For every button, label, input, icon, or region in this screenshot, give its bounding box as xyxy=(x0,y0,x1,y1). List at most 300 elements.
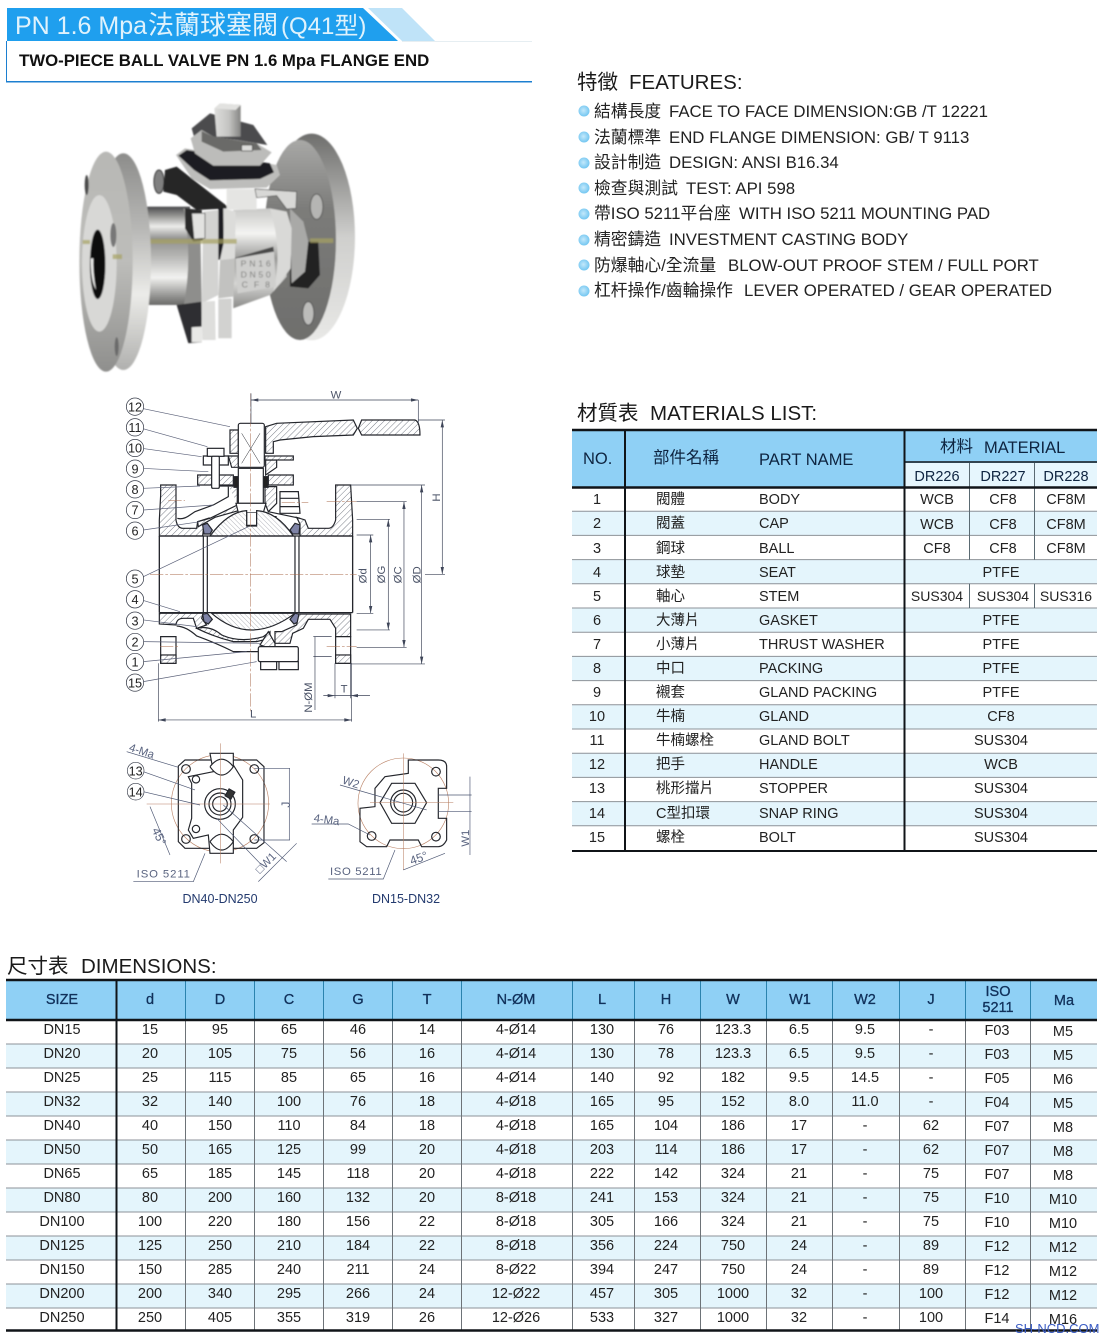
dimensions rows: 222 xyxy=(590,1166,614,1182)
dimensions rows: 75 xyxy=(281,1046,297,1062)
dimensions rows: 327 xyxy=(654,1310,678,1326)
dimensions rows: 180 xyxy=(277,1214,301,1230)
dimensions rows: 114 xyxy=(654,1142,678,1158)
dimensions rows: 355 xyxy=(277,1310,301,1326)
dimensions rows: F14 xyxy=(984,1311,1010,1327)
dimensions rows: DN20 xyxy=(43,1046,81,1062)
features list: FACE TO FACE DIMENSION:GB /T 12221 xyxy=(669,102,988,121)
top view drawing: DN40-DN250: □W1 xyxy=(254,851,279,876)
dimensions rows: 1000 xyxy=(717,1310,749,1326)
dimensions rows: 100 xyxy=(138,1214,162,1230)
dimensions rows: M10 xyxy=(1049,1216,1077,1232)
dimensions rows: 405 xyxy=(208,1310,232,1326)
materials rows: PTFE xyxy=(982,565,1020,581)
dimensions header: W2 xyxy=(854,992,876,1008)
part number callouts: 8 xyxy=(131,483,139,497)
dimensions rows: - xyxy=(863,1214,868,1230)
materials rows: CF8M xyxy=(1046,541,1086,557)
materials rows: SNAP RING xyxy=(759,806,839,822)
dimensions rows: 24 xyxy=(419,1262,435,1278)
dimensions rows: 160 xyxy=(277,1190,301,1206)
dimensions rows: 324 xyxy=(721,1166,745,1182)
dimensions rows: 104 xyxy=(654,1118,678,1134)
dimensions rows: 457 xyxy=(590,1286,614,1302)
dimensions rows: 84 xyxy=(350,1118,366,1134)
drawing captions: DN15-DN32 xyxy=(372,892,440,906)
materials rows: SUS304 xyxy=(911,588,963,604)
dimensions rows xyxy=(39,1022,1077,1328)
dimensions header: W1 xyxy=(789,992,811,1008)
dimensions rows: 24 xyxy=(791,1238,807,1254)
materials rows: 中口 xyxy=(656,661,685,677)
materials rows: 軸心 xyxy=(656,589,685,605)
dimensions rows: 203 xyxy=(590,1142,614,1158)
dimensions rows: F07 xyxy=(984,1167,1010,1183)
dimensions rows: 24 xyxy=(419,1286,435,1302)
dimensions rows: - xyxy=(863,1166,868,1182)
dimensions rows: DN125 xyxy=(39,1238,85,1254)
dimensions rows: 132 xyxy=(346,1190,370,1206)
dimensions rows: 8-Ø18 xyxy=(496,1214,536,1230)
dimensions rows: - xyxy=(863,1262,868,1278)
dimensions rows: 22 xyxy=(419,1238,435,1254)
dimensions rows: F10 xyxy=(984,1215,1010,1231)
dimensions rows: 32 xyxy=(791,1310,807,1326)
dimensions rows: 76 xyxy=(658,1022,674,1038)
materials rows: 13 xyxy=(589,781,605,797)
materials rows: CAP xyxy=(759,516,789,532)
section drawing: valve cross-section: W xyxy=(331,389,342,401)
title banner xyxy=(6,8,532,82)
top view drawing: DN40-DN250: J xyxy=(279,802,293,808)
materials rows: 球墊 xyxy=(656,565,685,581)
dimensions rows: 14 xyxy=(419,1022,435,1038)
materials rows: 14 xyxy=(589,806,605,822)
dimensions rows: F05 xyxy=(984,1071,1010,1087)
features list: END FLANGE DIMENSION: GB/ T 9113 xyxy=(669,128,969,147)
dimensions rows: DN250 xyxy=(39,1310,85,1326)
dimensions rows: 295 xyxy=(277,1286,301,1302)
materials rows: SUS304 xyxy=(974,733,1028,749)
materials rows xyxy=(589,491,1092,846)
features list: 結構長度 xyxy=(594,102,661,121)
dimensions rows: 100 xyxy=(919,1286,943,1302)
dimensions rows: DN150 xyxy=(39,1262,85,1278)
materials rows: PTFE xyxy=(982,613,1020,629)
dimensions rows: 21 xyxy=(791,1214,807,1230)
dimensions rows: M5 xyxy=(1053,1024,1073,1040)
dimensions header: J xyxy=(927,992,935,1008)
section drawing: valve cross-section: ØD xyxy=(412,566,424,583)
dimensions rows: 26 xyxy=(419,1310,435,1326)
materials rows: 15 xyxy=(589,830,605,846)
dimensions rows: - xyxy=(863,1286,868,1302)
dimensions rows: 75 xyxy=(923,1190,939,1206)
dimensions rows: F07 xyxy=(984,1143,1010,1159)
materials rows: 鋼球 xyxy=(656,541,685,557)
dimensions header: d xyxy=(146,992,154,1008)
dimensions header: D xyxy=(215,992,225,1008)
title text: 法蘭球塞閥 xyxy=(148,10,278,40)
dimensions rows: 17 xyxy=(791,1118,807,1134)
heading: features: FEATURES: xyxy=(629,71,743,94)
dimensions rows: 62 xyxy=(923,1118,939,1134)
materials rows: 1 xyxy=(593,492,601,508)
dimensions rows: 123.3 xyxy=(715,1022,751,1038)
dimensions rows: 18 xyxy=(419,1118,435,1134)
dimensions rows: DN65 xyxy=(43,1166,81,1182)
dimensions rows: 156 xyxy=(346,1214,370,1230)
materials rows: 7 xyxy=(593,637,601,653)
dimensions rows: 4-Ø14 xyxy=(496,1046,536,1062)
dimensions rows: 152 xyxy=(721,1094,745,1110)
dimensions header: SIZE xyxy=(46,992,78,1008)
dimensions rows: 4-Ø18 xyxy=(496,1094,536,1110)
materials rows: THRUST WASHER xyxy=(759,637,885,653)
dimensions rows: 150 xyxy=(208,1118,232,1134)
materials rows: 大薄片 xyxy=(656,613,700,629)
dimensions rows: 9.5 xyxy=(855,1022,875,1038)
part number callouts xyxy=(126,398,144,691)
top view drawing: DN40-DN250: ISO 5211 xyxy=(137,868,190,880)
dimensions header: N-ØM xyxy=(497,992,535,1008)
dimensions rows: 8-Ø18 xyxy=(496,1190,536,1206)
dimensions rows: 89 xyxy=(923,1262,939,1278)
dimensions rows: 140 xyxy=(208,1094,232,1110)
dimensions rows: 78 xyxy=(658,1046,674,1062)
materials rows: 3 xyxy=(593,541,601,557)
top view drawing: DN40-DN250: 13 xyxy=(129,764,143,778)
dimensions rows: 250 xyxy=(138,1310,162,1326)
top view drawing: DN40-DN250: 14 xyxy=(129,785,143,799)
materials rows: CF8 xyxy=(923,541,951,557)
dimensions rows: 15 xyxy=(142,1022,158,1038)
section drawing: valve cross-section: N-ØM xyxy=(303,682,315,713)
materials rows: WCB xyxy=(920,492,954,508)
top view drawing: DN15-DN32: W1 xyxy=(460,830,472,847)
dimensions rows: F07 xyxy=(984,1119,1010,1135)
materials rows: 襯套 xyxy=(656,685,685,701)
dimensions rows: 182 xyxy=(721,1070,745,1086)
features list: BLOW-OUT PROOF STEM / FULL PORT xyxy=(728,256,1039,275)
features list: 檢查與測試 xyxy=(594,179,678,198)
dimension lines xyxy=(158,393,445,722)
materials rows: 10 xyxy=(589,709,605,725)
features list: 防爆軸心/全流量 xyxy=(594,256,716,275)
top view drawing: DN40-DN250: 4-Ma xyxy=(127,742,156,762)
dimensions rows: 240 xyxy=(277,1262,301,1278)
features list: 杠杆操作/齒輪操作 xyxy=(594,281,733,300)
dimensions rows: 20 xyxy=(419,1166,435,1182)
dimensions rows: 324 xyxy=(721,1214,745,1230)
materials header text: MATERIAL xyxy=(984,439,1065,457)
features list: TEST: API 598 xyxy=(686,179,795,198)
heading: features: 特徵 xyxy=(577,71,618,94)
top view drawing: DN15-DN32: ISO 5211 xyxy=(330,866,382,878)
dimensions rows: M6 xyxy=(1053,1072,1073,1088)
part number callouts: 10 xyxy=(128,442,142,456)
subtitle: TWO-PIECE BALL VALVE PN 1.6 Mpa FLANGE END xyxy=(19,51,429,70)
dimensions header: Ma xyxy=(1054,993,1075,1009)
dimensions rows: 247 xyxy=(654,1262,678,1278)
dimensions rows: 11.0 xyxy=(851,1094,879,1110)
dimensions header: C xyxy=(284,992,294,1008)
dimensions rows: 211 xyxy=(346,1262,370,1278)
section drawing: valve cross-section: H xyxy=(431,493,443,502)
dimensions rows: DN15 xyxy=(43,1022,81,1038)
dimensions rows: 21 xyxy=(791,1166,807,1182)
section drawing: valve cross-section: ØG xyxy=(376,566,388,583)
materials rows: 小薄片 xyxy=(656,637,700,653)
features list: 設計制造 xyxy=(594,153,661,172)
dimensions rows: 62 xyxy=(923,1142,939,1158)
dimensions rows: 185 xyxy=(208,1166,232,1182)
dimensions rows: M5 xyxy=(1053,1048,1073,1064)
dimensions rows: 224 xyxy=(654,1238,678,1254)
materials rows: CF8 xyxy=(987,709,1015,725)
dimensions rows: - xyxy=(863,1118,868,1134)
dimensions rows: DN32 xyxy=(43,1094,81,1110)
materials rows: STEM xyxy=(759,589,799,605)
materials rows: CF8 xyxy=(989,541,1017,557)
dimensions rows: 25 xyxy=(142,1070,158,1086)
dimensions rows: 150 xyxy=(138,1262,162,1278)
dimensions rows: DN50 xyxy=(43,1142,81,1158)
dimensions rows: F12 xyxy=(984,1287,1010,1303)
dimensions rows: 6.5 xyxy=(789,1046,809,1062)
features list xyxy=(578,102,1052,300)
materials rows: WCB xyxy=(920,517,954,533)
features list: 法蘭標準 xyxy=(594,128,661,147)
dimensions rows: 24 xyxy=(791,1262,807,1278)
top view drawing: DN40-DN250 xyxy=(127,742,297,882)
dimensions rows: - xyxy=(929,1022,934,1038)
materials rows: GLAND xyxy=(759,709,809,725)
dimensions rows: 9.5 xyxy=(789,1070,809,1086)
dimensions rows: 140 xyxy=(590,1070,614,1086)
dimensions rows: 4-Ø18 xyxy=(496,1142,536,1158)
table: dimensions xyxy=(6,980,1097,1331)
materials rows: HANDLE xyxy=(759,757,818,773)
dimensions rows: 75 xyxy=(923,1166,939,1182)
dimensions rows: 12-Ø26 xyxy=(492,1310,540,1326)
dimensions rows: 130 xyxy=(590,1022,614,1038)
features list: DESIGN: ANSI B16.34 xyxy=(669,153,839,172)
dimensions rows: 32 xyxy=(791,1286,807,1302)
materials rows: SUS304 xyxy=(974,830,1028,846)
dimensions rows: - xyxy=(929,1046,934,1062)
dimensions rows: DN25 xyxy=(43,1070,81,1086)
top view drawing: DN15-DN32: 45° xyxy=(408,848,430,868)
materials rows: GLAND BOLT xyxy=(759,733,850,749)
dimensions rows: 85 xyxy=(281,1070,297,1086)
section drawing: valve cross-section: Ød xyxy=(358,568,370,583)
dimensions rows: 12-Ø22 xyxy=(492,1286,540,1302)
features list: INVESTMENT CASTING BODY xyxy=(669,230,908,249)
dimensions header: T xyxy=(423,992,432,1008)
materials rows: 12 xyxy=(589,757,605,773)
dimensions rows: M8 xyxy=(1053,1144,1073,1160)
part number callouts: 11 xyxy=(128,421,142,435)
heading: materials list: MATERIALS LIST: xyxy=(650,402,817,425)
part number callouts: 12 xyxy=(128,400,142,414)
materials rows: PTFE xyxy=(982,661,1020,677)
dimensions rows: 305 xyxy=(654,1286,678,1302)
dimensions rows: F04 xyxy=(984,1095,1010,1111)
materials rows: 螺栓 xyxy=(656,830,685,846)
dimensions rows: - xyxy=(929,1094,934,1110)
top view drawing: DN40-DN250: 45° xyxy=(149,825,169,848)
dimensions rows: M10 xyxy=(1049,1192,1077,1208)
dimensions rows: M16 xyxy=(1049,1312,1077,1328)
dimensions rows: 20 xyxy=(419,1190,435,1206)
dimensions rows: 20 xyxy=(142,1046,158,1062)
dimensions rows: 220 xyxy=(208,1214,232,1230)
materials rows: PACKING xyxy=(759,661,823,677)
dimensions rows: 200 xyxy=(208,1190,232,1206)
materials rows: PTFE xyxy=(982,685,1020,701)
materials rows: 閥蓋 xyxy=(656,516,685,532)
part number callouts: 15 xyxy=(128,676,142,690)
dimensions rows: 145 xyxy=(277,1166,301,1182)
heading: dimensions: 尺寸表 xyxy=(7,955,68,978)
dimensions rows: 210 xyxy=(277,1238,301,1254)
materials rows: 牛楠 xyxy=(656,709,685,725)
dimensions rows: 32 xyxy=(142,1094,158,1110)
dimensions rows: 319 xyxy=(346,1310,370,1326)
materials rows: 桃形擋片 xyxy=(656,781,714,797)
dimensions rows: - xyxy=(929,1070,934,1086)
materials rows: 9 xyxy=(593,685,601,701)
materials rows: CF8M xyxy=(1046,492,1086,508)
dimensions rows: 56 xyxy=(350,1046,366,1062)
dimensions rows: 305 xyxy=(590,1214,614,1230)
materials header text: PART NAME xyxy=(759,451,853,469)
section drawing: valve cross-section: T xyxy=(341,684,348,696)
materials rows: 11 xyxy=(589,733,605,749)
dimensions rows: 340 xyxy=(208,1286,232,1302)
dimensions rows: 110 xyxy=(277,1118,301,1134)
materials rows: CF8M xyxy=(1046,517,1086,533)
dimensions rows: 95 xyxy=(212,1022,228,1038)
dimensions rows: 125 xyxy=(138,1238,162,1254)
dimensions rows: 17 xyxy=(791,1142,807,1158)
dimensions rows: M5 xyxy=(1053,1096,1073,1112)
product photo: ball valve xyxy=(79,103,355,372)
materials rows: SUS304 xyxy=(974,781,1028,797)
dimensions rows: 356 xyxy=(590,1238,614,1254)
table: materials list xyxy=(572,430,1097,851)
dimensions rows: 21 xyxy=(791,1190,807,1206)
dimensions header: L xyxy=(598,992,606,1008)
materials rows: 把手 xyxy=(656,757,685,773)
dimensions rows: 46 xyxy=(350,1022,366,1038)
dimensions rows: 165 xyxy=(590,1094,614,1110)
part number callouts: 4 xyxy=(131,593,139,607)
dimensions rows: 20 xyxy=(419,1142,435,1158)
features list: WITH ISO 5211 MOUNTING PAD xyxy=(739,204,990,223)
dimensions rows: F03 xyxy=(984,1023,1010,1039)
materials header text: DR226 xyxy=(914,469,960,485)
dimensions rows: - xyxy=(863,1310,868,1326)
dimensions rows: 130 xyxy=(590,1046,614,1062)
materials rows: 8 xyxy=(593,661,601,677)
dimensions rows: 1000 xyxy=(717,1286,749,1302)
dimensions rows: M12 xyxy=(1049,1240,1077,1256)
dimensions rows: M12 xyxy=(1049,1264,1077,1280)
product photo: ball valve: DN50 xyxy=(241,269,271,279)
product photo: ball valve: PN16 xyxy=(241,259,271,269)
heading: dimensions: DIMENSIONS: xyxy=(81,955,217,978)
watermark: SH-NCD.COM xyxy=(1015,1321,1100,1336)
dimensions rows: DN40 xyxy=(43,1118,81,1134)
dimensions rows: 105 xyxy=(208,1046,232,1062)
features list: LEVER OPERATED / GEAR OPERATED xyxy=(744,281,1052,300)
materials rows: SEAT xyxy=(759,565,796,581)
materials header text: DR227 xyxy=(980,469,1026,485)
dimensions rows: F12 xyxy=(984,1263,1010,1279)
dimensions rows: 100 xyxy=(919,1310,943,1326)
dimensions rows: 4-Ø18 xyxy=(496,1118,536,1134)
dimensions rows: 16 xyxy=(419,1046,435,1062)
dimensions rows: 100 xyxy=(277,1094,301,1110)
part number callouts: 7 xyxy=(131,504,139,518)
dimensions rows: 250 xyxy=(208,1238,232,1254)
dimensions rows: 76 xyxy=(350,1094,366,1110)
dimensions rows: 4-Ø18 xyxy=(496,1166,536,1182)
dimensions rows: 65 xyxy=(281,1022,297,1038)
features list: 精密鑄造 xyxy=(594,230,661,249)
materials rows: GASKET xyxy=(759,613,818,629)
dimensions header: 5211 xyxy=(982,1000,1014,1016)
dimensions header: G xyxy=(352,992,364,1008)
materials rows: 5 xyxy=(593,589,601,605)
dimensions rows: 4-Ø14 xyxy=(496,1070,536,1086)
dimensions header: H xyxy=(661,992,671,1008)
materials rows: 4 xyxy=(593,565,601,581)
dimensions rows: 266 xyxy=(346,1286,370,1302)
dimensions rows: 115 xyxy=(208,1070,232,1086)
dimensions header: W xyxy=(726,992,740,1008)
dimensions rows: 394 xyxy=(590,1262,614,1278)
title text: PN 1.6 Mpa xyxy=(15,12,147,40)
dimensions rows: 186 xyxy=(721,1118,745,1134)
dimensions rows: 324 xyxy=(721,1190,745,1206)
dimensions rows: 184 xyxy=(346,1238,370,1254)
dimensions rows: DN100 xyxy=(39,1214,85,1230)
materials rows: STOPPER xyxy=(759,781,828,797)
dimensions rows: DN80 xyxy=(43,1190,81,1206)
materials rows: SUS316 xyxy=(1040,588,1092,604)
materials header text: 材料 xyxy=(940,437,973,456)
dimensions rows: 65 xyxy=(350,1070,366,1086)
dimensions rows: 241 xyxy=(590,1190,614,1206)
drawing captions: DN40-DN250 xyxy=(182,892,258,906)
materials rows: 閥體 xyxy=(656,492,685,508)
materials header text xyxy=(583,437,1089,485)
materials rows: PTFE xyxy=(982,637,1020,653)
materials rows: BOLT xyxy=(759,830,796,846)
dimensions rows: 75 xyxy=(923,1214,939,1230)
dimensions rows: 65 xyxy=(142,1166,158,1182)
materials rows: SUS304 xyxy=(977,588,1029,604)
dimensions rows: 18 xyxy=(419,1094,435,1110)
materials rows: SUS304 xyxy=(974,806,1028,822)
dimensions rows: M8 xyxy=(1053,1168,1073,1184)
dimensions rows: 153 xyxy=(654,1190,678,1206)
dimensions rows: 6.5 xyxy=(789,1022,809,1038)
dimensions rows: 99 xyxy=(350,1142,366,1158)
